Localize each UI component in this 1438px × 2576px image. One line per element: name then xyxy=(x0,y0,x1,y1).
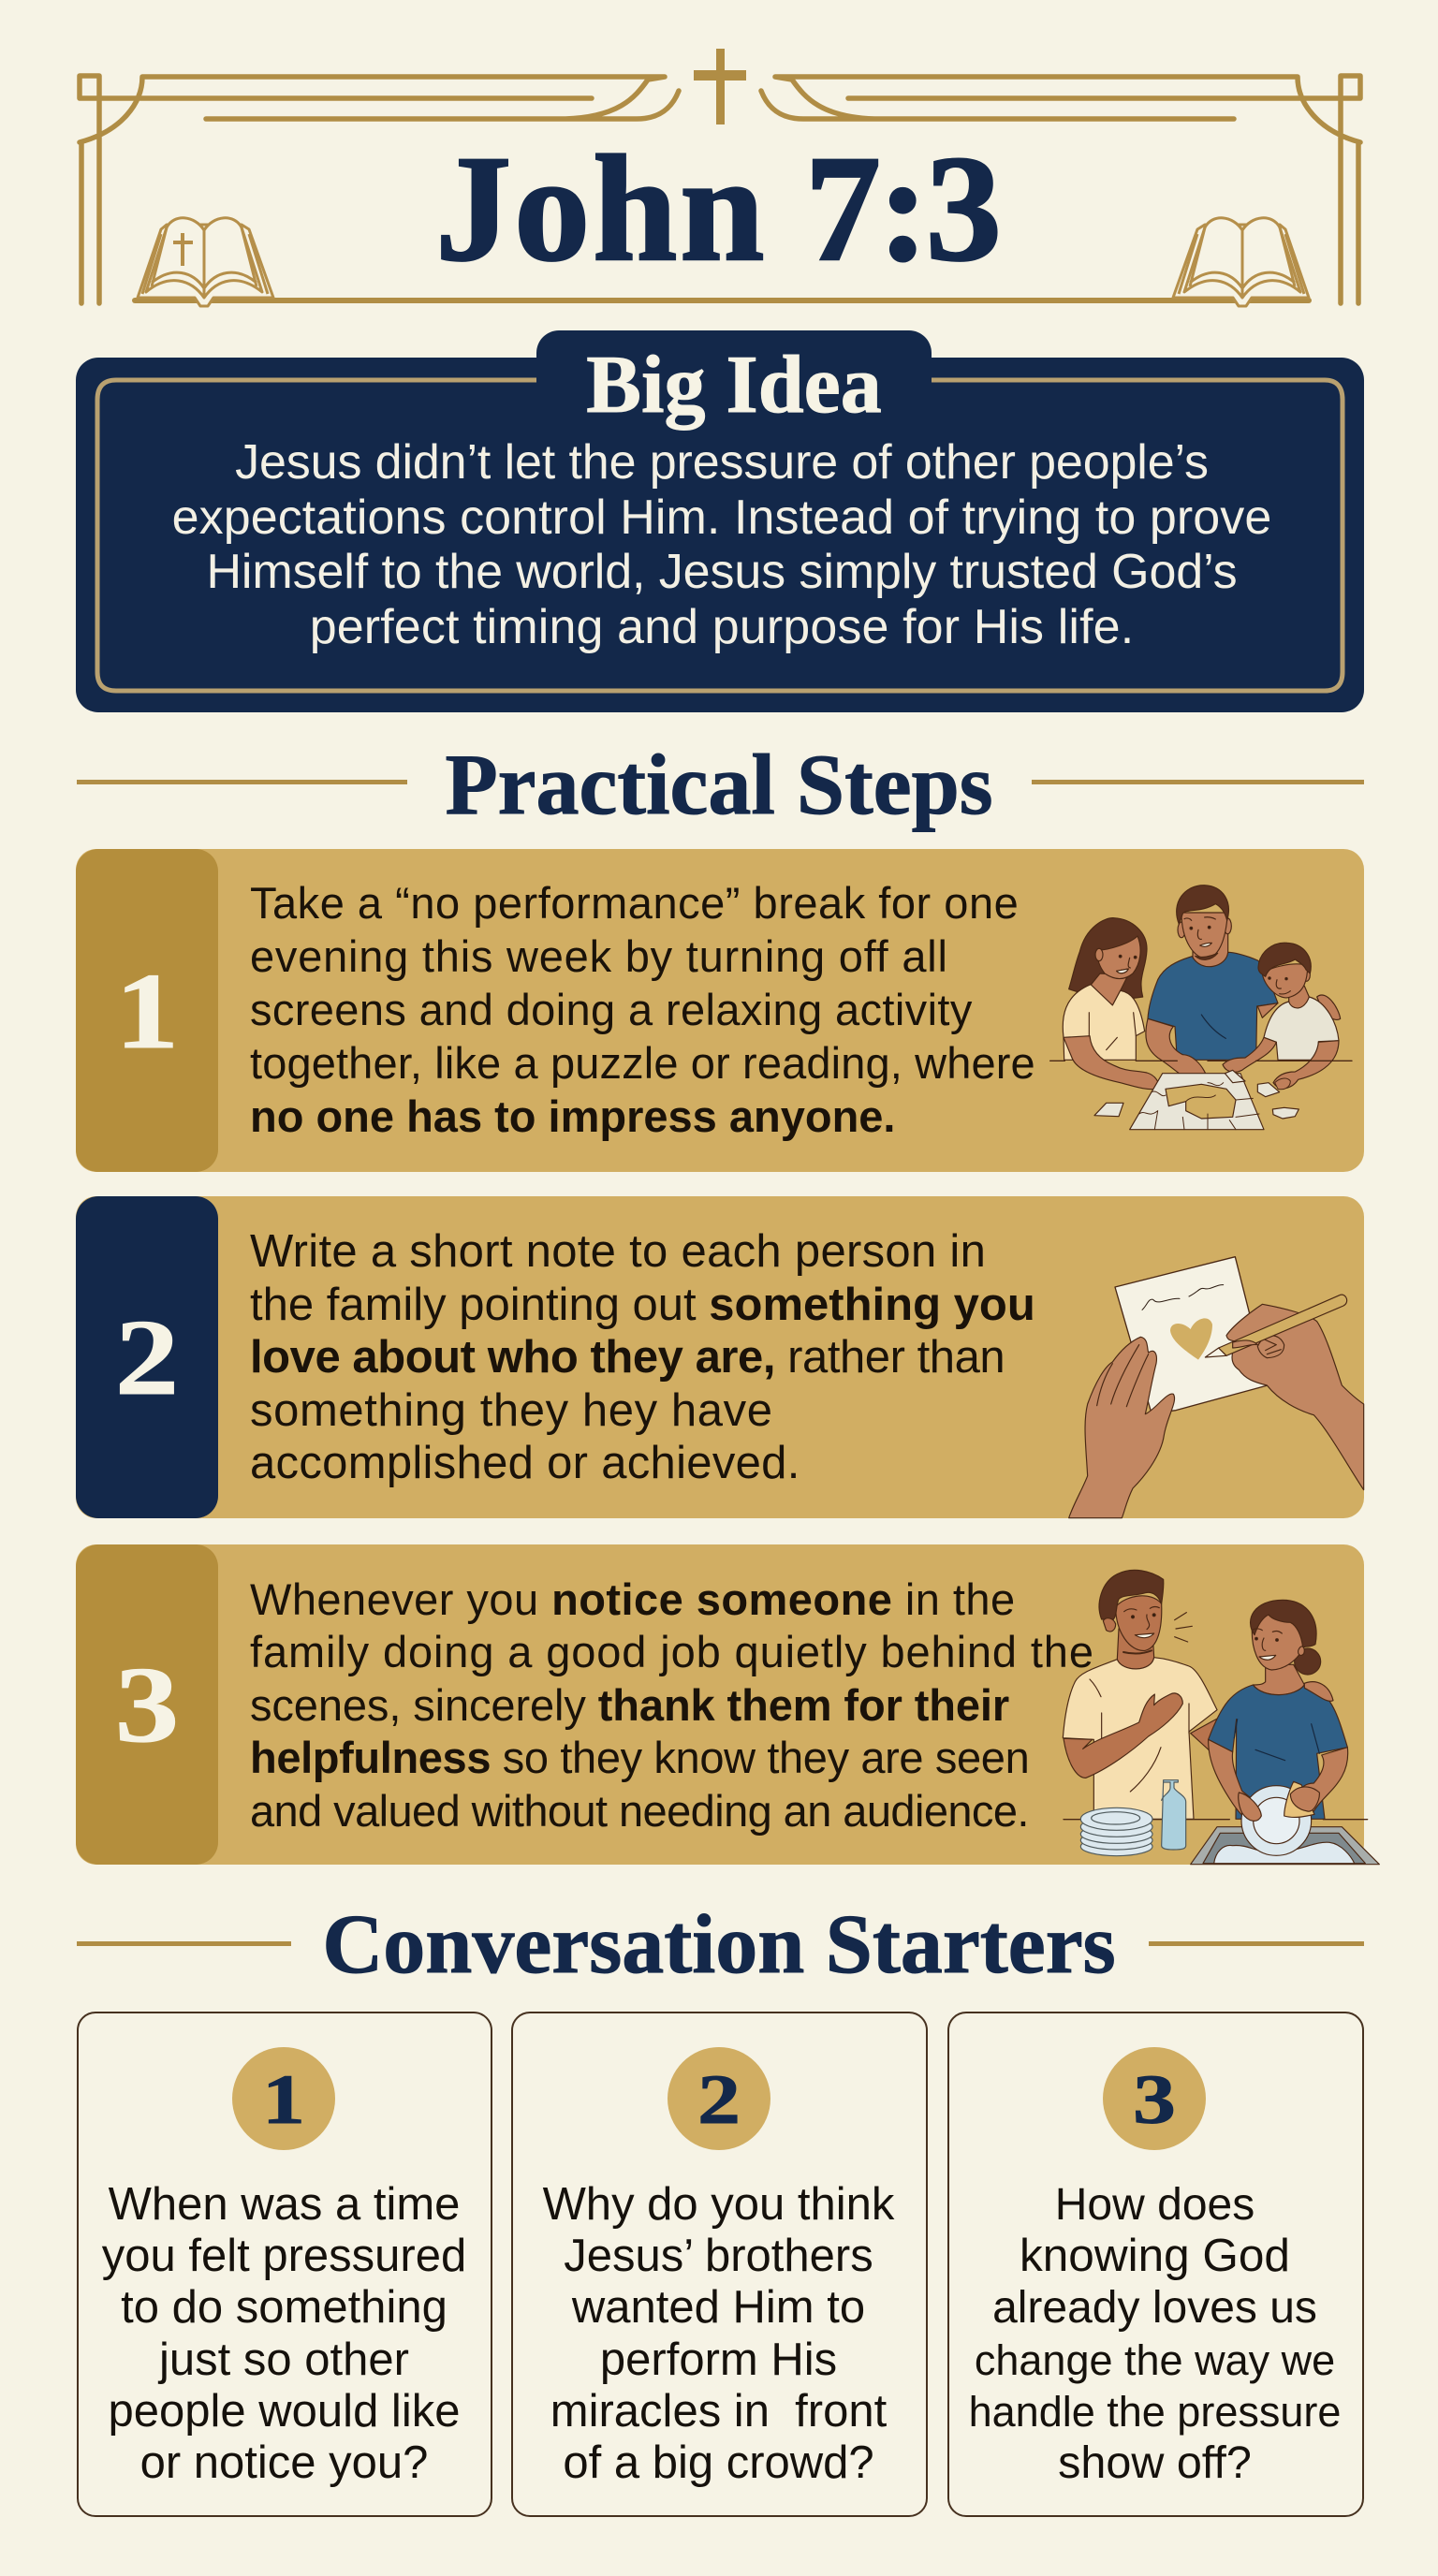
panel: step 3 card xyxy=(76,1544,1364,1865)
step 2 text: something they hey have xyxy=(250,1385,773,1436)
big idea body text: Himself to the world, Jesus simply trusted God’s xyxy=(206,545,1238,599)
panel: question card 1 xyxy=(77,2012,492,2517)
step 2 number tab xyxy=(76,1196,218,1518)
panel: question card 2 xyxy=(511,2012,928,2517)
step 2 text xyxy=(250,1226,1035,1488)
illustration: family doing a puzzle xyxy=(1049,885,1353,1131)
question 1 number badge xyxy=(232,2047,335,2150)
illustration: thanking someone washing dishes xyxy=(1062,1569,1380,1865)
step 1 text: evening this week by turning off all xyxy=(250,931,948,981)
rule right of conversation starters xyxy=(1149,1941,1364,1946)
step 1 text: Take a “no performance” break for one xyxy=(250,878,1019,928)
step 2 text: love about who they are, rather than xyxy=(250,1332,1005,1383)
heading: practical steps: Practical Steps xyxy=(445,737,993,832)
rule left of conversation starters xyxy=(77,1941,291,1946)
step 1 text: screens and doing a relaxing activity xyxy=(250,985,973,1034)
step 3 number tab xyxy=(76,1544,218,1865)
big idea body text: Jesus didn’t let the pressure of other people’s xyxy=(235,435,1209,490)
icon: cross xyxy=(694,49,746,124)
big idea heading: Big Idea xyxy=(586,340,882,431)
question 2 number badge xyxy=(668,2047,770,2150)
big idea body text xyxy=(172,435,1271,653)
icon: right open book xyxy=(1173,218,1309,306)
question 2 text: Why do you think Jesus’ brothers wanted Him to perform His miracles in front of a big crowd? xyxy=(543,2179,894,2488)
icon: left open book xyxy=(138,218,273,306)
step 1 number tab xyxy=(76,849,218,1172)
step 2 text: Write a short note to each person in xyxy=(250,1226,986,1277)
question 2 number: 2 xyxy=(697,2061,741,2139)
heading: conversation starters: Conversation Starters xyxy=(322,1898,1116,1991)
step 2 number: 2 xyxy=(115,1298,179,1418)
step 2 text: the family pointing out something you xyxy=(250,1280,1035,1330)
step 3 text: family doing a good job quietly behind the xyxy=(250,1627,1094,1676)
illustration: hands writing a note xyxy=(1068,1256,1365,1518)
rule left of practical steps xyxy=(77,780,407,784)
step 3 text: and valued without needing an audience. xyxy=(250,1786,1029,1836)
title: John 7:3 xyxy=(435,125,999,293)
step 2 text: accomplished or achieved. xyxy=(250,1438,800,1488)
question 3 text: How does knowing God already loves us change the way we handle the pressure show off? xyxy=(969,2180,1341,2488)
step 3 text: helpfulness so they know they are seen xyxy=(250,1733,1029,1782)
big idea gold inner border xyxy=(95,378,1344,693)
question 1 text: When was a time you felt pressured to do something just so other people would like or notice you? xyxy=(102,2179,466,2488)
step 1 text xyxy=(250,878,1035,1141)
panel: big idea xyxy=(76,358,1364,712)
step 3 text: Whenever you notice someone in the xyxy=(250,1574,1016,1624)
ornamental header frame with cross and open books xyxy=(77,49,1363,307)
panel: question card 3 xyxy=(947,2012,1364,2517)
question 3 number: 3 xyxy=(1133,2061,1176,2139)
step 3 text: scenes, sincerely thank them for their xyxy=(250,1680,1009,1730)
big idea tab xyxy=(536,330,932,405)
panel: step 2 card xyxy=(76,1196,1364,1518)
rule right of practical steps xyxy=(1032,780,1364,784)
step 1 text: together, like a puzzle or reading, where xyxy=(250,1038,1035,1088)
panel: step 1 card xyxy=(76,849,1364,1172)
big idea body text: perfect timing and purpose for His life. xyxy=(310,599,1134,653)
question 3 number badge xyxy=(1103,2047,1206,2150)
step 3 text xyxy=(250,1574,1094,1836)
step 1 number: 1 xyxy=(115,952,179,1072)
step 1 text: no one has to impress anyone. xyxy=(250,1091,895,1141)
question 1 number: 1 xyxy=(262,2061,305,2139)
big idea body text: expectations control Him. Instead of trying to prove xyxy=(172,490,1271,545)
step 3 number: 3 xyxy=(115,1646,179,1765)
